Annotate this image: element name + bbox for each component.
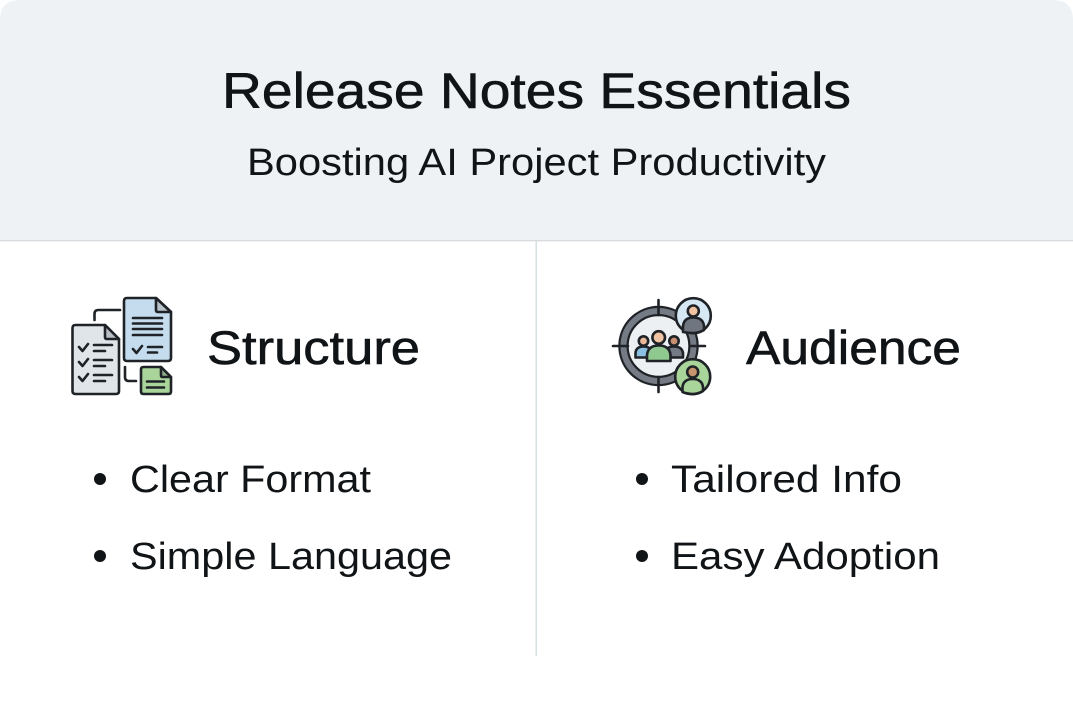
panel: audience	[613, 298, 961, 578]
panel: structure	[72, 298, 452, 578]
icon: audience target	[613, 298, 711, 394]
bullet list: audience	[636, 459, 940, 578]
bullet list: structure	[94, 459, 452, 578]
header panel	[0, 0, 1073, 241]
heading: Structure: Structure	[207, 321, 420, 374]
heading: Audience: Audience	[746, 321, 961, 374]
subtitle: Boosting AI Project Productivity	[247, 142, 826, 184]
column divider	[536, 241, 537, 656]
bullet: Simple Language: Simple Language	[130, 536, 452, 578]
title: Release Notes Essentials	[222, 63, 851, 119]
bullet: Easy Adoption: Easy Adoption	[671, 536, 940, 578]
bullet: Tailored Info: Tailored Info	[671, 459, 902, 501]
bullet: Clear Format: Clear Format	[130, 459, 371, 501]
icon: documents	[72, 298, 171, 394]
